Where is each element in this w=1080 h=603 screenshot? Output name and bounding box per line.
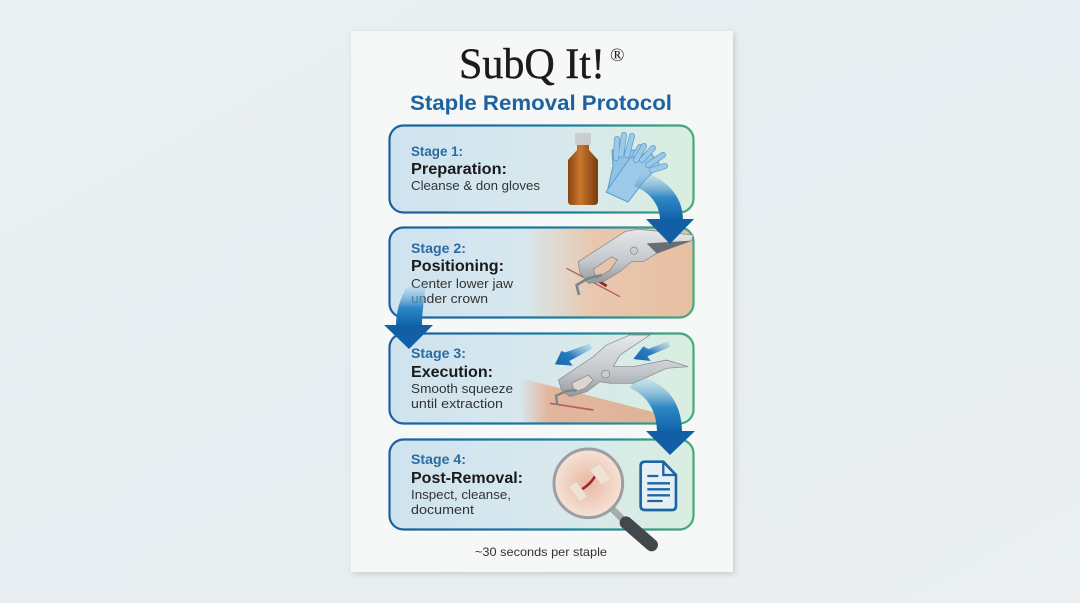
logo: ® <box>610 45 624 66</box>
panel: stage 1 <box>390 126 694 212</box>
stage 1 text: Stage 1: <box>411 144 463 159</box>
footer note: ~30 seconds per staple <box>475 545 607 559</box>
stage 4 text: Post-Removal: <box>411 470 523 487</box>
stage 4 text: document <box>411 503 475 517</box>
stage 4 text: Inspect, cleanse, <box>411 488 511 502</box>
icon: document <box>641 462 676 510</box>
skin photo: stage 3 <box>520 378 657 423</box>
arrow: stage 3 to stage 4 <box>630 377 695 455</box>
icon: gloves <box>606 135 665 202</box>
stage 3 text: Stage 3: <box>411 346 466 361</box>
panel: stage 2 <box>390 228 694 318</box>
arrow: stage 2 to stage 3 <box>384 285 433 349</box>
stage 2 text: Stage 2: <box>411 241 466 256</box>
stage 2 text: Positioning: <box>411 258 504 275</box>
stage 3 text: Execution: <box>411 364 493 381</box>
stage 3 text <box>411 346 513 411</box>
panel: stage 4 <box>390 440 694 545</box>
panel: stage 3 <box>390 334 694 424</box>
stage 2 text: under crown <box>411 292 488 306</box>
stage 2 text <box>411 241 514 306</box>
stage 4 text: Stage 4: <box>411 452 466 467</box>
stage 1 text <box>411 144 540 193</box>
arrow: squeeze right <box>633 341 670 361</box>
stage 1 text: Preparation: <box>411 161 507 178</box>
illustration: staple remover squeezing <box>550 335 688 410</box>
illustration: staple remover on incision <box>567 229 693 297</box>
arrow: squeeze left <box>555 343 592 366</box>
heading: Staple Removal Protocol <box>410 92 672 115</box>
infographic scene <box>351 31 737 576</box>
arrow: stage 1 to stage 2 <box>634 171 694 244</box>
stage 3 text: until extraction <box>411 397 503 411</box>
skin photo: stage 2 <box>525 228 693 317</box>
card shadow <box>353 33 735 574</box>
poster card <box>351 31 733 572</box>
stage 3 text: Smooth squeeze <box>411 382 513 396</box>
stage 2 text: Center lower jaw <box>411 277 514 291</box>
icon: magnifying glass <box>554 449 652 545</box>
icon: antiseptic bottle <box>568 133 598 205</box>
stage 4 text <box>411 452 523 517</box>
stage 1 text: Cleanse & don gloves <box>411 179 540 193</box>
logo: SubQ It! <box>459 41 605 88</box>
